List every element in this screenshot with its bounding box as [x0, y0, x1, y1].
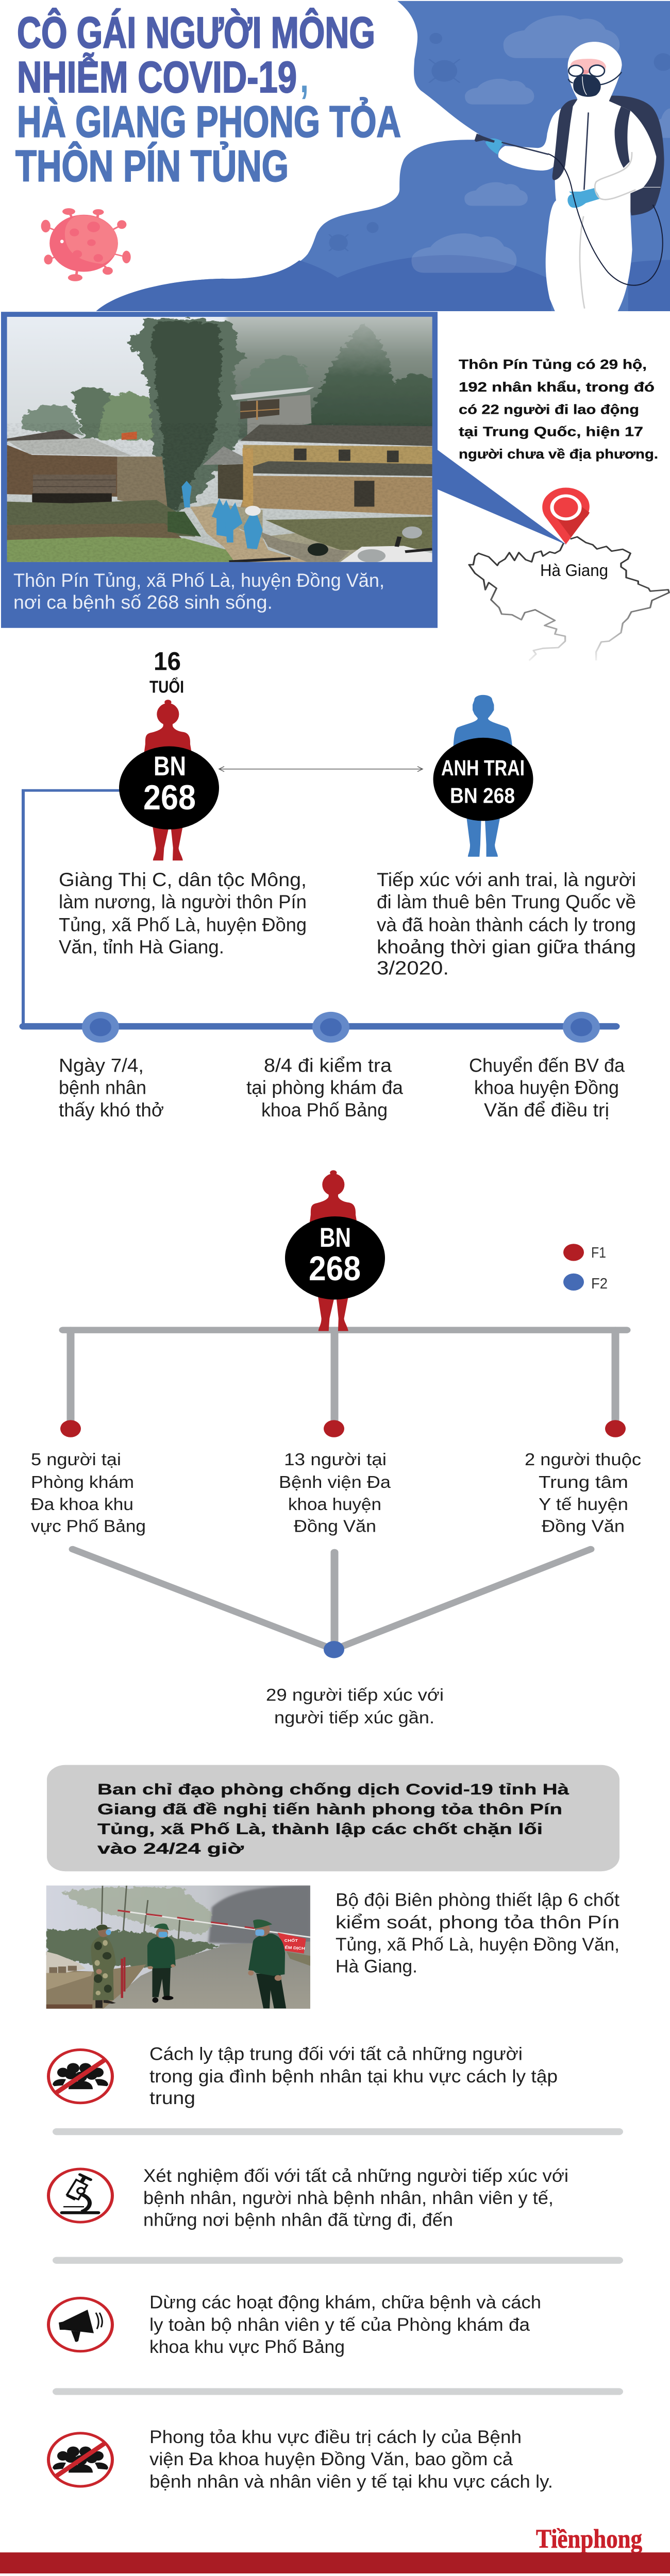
timeline text 2: khoa Phố Bảng — [261, 1099, 388, 1121]
F1 text left: vực Phố Bảng — [31, 1517, 146, 1536]
panel: lockdown proposal: Giang đã đề nghị tiến hành phong tỏa thôn Pín — [97, 1801, 562, 1818]
text: item 2: bệnh nhân, người nhà bệnh nhân, nhân viên y tế, — [143, 2188, 554, 2208]
icon: megaphone — [48, 2298, 112, 2351]
F1 text center — [279, 1450, 391, 1536]
icon: no crowd — [48, 2050, 112, 2103]
panel: lockdown proposal: Tủng, xã Phố Là, thành lập các chốt chặn lối — [97, 1821, 543, 1838]
figure: patient 268: 268 — [143, 778, 196, 817]
timeline text 2 — [246, 1055, 403, 1121]
text: item 4: bệnh nhân và nhân viên y tế tại khu vực cách ly. — [149, 2472, 553, 2492]
F1 text right: Trung tâm — [539, 1472, 628, 1492]
terrain — [118, 456, 167, 510]
village facts text: Thôn Pín Tủng có 29 hộ, — [459, 357, 647, 372]
F2 text — [266, 1685, 444, 1727]
text: brother description: khoảng thời gian giữa tháng — [377, 936, 636, 958]
soldier 1 — [91, 1925, 116, 2008]
clouds — [411, 15, 670, 273]
caption: Thôn Pín Tủng, xã Phố Là, huyện Đồng Văn, — [13, 569, 384, 591]
respirator — [573, 74, 601, 97]
text: item 3 — [149, 2293, 541, 2357]
upper house — [247, 395, 311, 435]
figure: brother: BN 268 — [450, 783, 515, 807]
timeline text 3: Văn để điều trị — [484, 1099, 609, 1121]
soldier 3 — [248, 1920, 286, 2008]
icon: microscope — [48, 2169, 112, 2222]
soldier 2 — [147, 1924, 176, 2003]
timeline — [23, 1012, 616, 1043]
age label: TUỔI — [149, 676, 184, 697]
map label: Hà Giang — [540, 561, 608, 580]
left house — [7, 430, 81, 442]
legend — [563, 1244, 608, 1292]
background conifers — [307, 323, 436, 428]
hillside vegetation — [46, 1929, 219, 1967]
small dark viruses — [329, 33, 670, 251]
panel: village photo — [1, 312, 439, 628]
red posts — [121, 1957, 125, 1998]
icon: no crowd second — [48, 2433, 112, 2486]
timeline text 1: bệnh nhân — [59, 1077, 146, 1098]
figure: patient 268 second: 268 — [309, 1249, 361, 1287]
photo: border guards at checkpoint — [46, 1886, 310, 2009]
F1 text center: khoa huyện — [288, 1495, 381, 1514]
F1 text center: Đồng Văn — [294, 1517, 376, 1536]
timeline text 2: 8/4 đi kiểm tra — [264, 1055, 392, 1076]
figure: patient 268: BN — [154, 751, 186, 782]
text: checkpoints — [336, 1890, 619, 1977]
zip — [584, 112, 589, 190]
icon: map pin — [542, 488, 590, 544]
figure: brother — [433, 695, 533, 857]
village facts text: người chưa về địa phương. — [459, 447, 658, 462]
title: THÔN PÍN TỦNG — [15, 141, 289, 191]
timeline text 3: khoa huyện Đồng — [474, 1077, 619, 1098]
timeline node 3 — [563, 1012, 600, 1043]
motorbike — [340, 546, 432, 562]
title: CÔ GÁI NGƯỜI MÔNG — [17, 8, 375, 57]
footer bar — [0, 2552, 670, 2573]
village facts text: 192 nhân khẩu, trong đó — [459, 380, 655, 395]
text: brother description — [377, 869, 636, 979]
central tree — [128, 318, 245, 512]
title: HÀ GIANG PHONG TỎA — [17, 97, 401, 147]
F1 text right: 2 người thuộc — [525, 1450, 641, 1469]
text: item 1: trong gia đình bệnh nhân tại khu vực cách ly tập — [149, 2066, 558, 2087]
straps — [615, 106, 630, 168]
text: item 3: khoa khu vực Phố Bảng — [149, 2337, 345, 2357]
F1 text left: Phòng khám — [31, 1472, 134, 1492]
text: item 3: Dừng các hoạt động khám, chữa bệnh và cách — [149, 2293, 541, 2313]
timeline text 2: tại phòng khám đa — [246, 1077, 403, 1098]
title: NHIỄM COVID-19 — [17, 53, 297, 102]
panel: lockdown proposal: vào 24/24 giờ — [97, 1840, 244, 1857]
F1 text left: Đa khoa khu — [31, 1495, 133, 1514]
panel: lockdown proposal — [47, 1765, 619, 1871]
text: item 4: Phong tỏa khu vực điều trị cách ly của Bệnh — [149, 2427, 522, 2447]
village facts text — [459, 357, 658, 462]
callout wedge — [438, 450, 566, 545]
text: checkpoints: kiểm soát, phong tỏa thôn Pín — [336, 1912, 619, 1933]
spray lance and hose — [475, 133, 495, 143]
texture on roofs and ground — [7, 423, 432, 563]
figure: patient 268 second: BN — [320, 1223, 351, 1253]
panel: lockdown proposal: Ban chỉ đạo phòng chống dịch Covid-19 tỉnh Hà — [97, 1781, 569, 1798]
suit outlines — [595, 152, 635, 199]
F2 dot — [324, 1641, 344, 1658]
text: item 4: viện Đa khoa huyện Đồng Văn, bao gồm cả — [149, 2449, 513, 2469]
text: checkpoints: Hà Giang. — [336, 1957, 417, 1977]
caption: nơi ca bệnh số 268 sinh sống. — [13, 591, 273, 613]
F1 text right: Đồng Văn — [542, 1517, 625, 1536]
figure: patient 268 — [119, 700, 219, 860]
timeline text 3: Chuyển đến BV đa — [469, 1055, 625, 1076]
text: item 2: những nơi bệnh nhân đã từng đi, đến — [143, 2210, 453, 2230]
icon: coronavirus — [41, 208, 131, 281]
text: patient description: Văn, tỉnh Hà Giang. — [59, 936, 224, 958]
gloves — [485, 139, 504, 155]
F2 text: 29 người tiếp xúc với — [266, 1685, 444, 1704]
map: Hà Giang — [469, 537, 669, 660]
text: item 1 — [149, 2044, 558, 2108]
text: checkpoints: Bộ đội Biên phòng thiết lập 6 chốt — [336, 1890, 619, 1910]
age label — [149, 647, 184, 697]
F1 text left — [31, 1450, 146, 1536]
village facts text: tại Trung Quốc, hiện 17 — [459, 425, 643, 439]
F1 text center: 13 người tại — [284, 1450, 387, 1469]
arrow: contact between patient and brother — [219, 767, 423, 772]
illustration: person in protective suit spraying disinfectant — [475, 42, 664, 313]
text: patient description: Tủng, xã Phố Là, huyện Đồng — [59, 914, 307, 936]
barrier pole — [118, 1910, 310, 1937]
timeline text 1 — [59, 1055, 164, 1121]
banner: ỂM DỊCH — [284, 1944, 305, 1951]
darker hills — [96, 255, 670, 311]
medical team — [181, 481, 263, 549]
figure: patient 268 second — [285, 1170, 385, 1331]
main house — [243, 445, 432, 467]
text: checkpoints: Tủng, xã Phố Là, huyện Đồng Văn, — [336, 1935, 619, 1955]
text: patient description: Giàng Thị C, dân tộc Mông, — [59, 869, 307, 890]
timeline node 1 — [82, 1012, 119, 1043]
header illustration — [41, 1, 670, 311]
timeline text 3 — [469, 1055, 625, 1121]
title — [15, 8, 401, 191]
F1 text center: Bệnh viện Đa — [279, 1472, 391, 1492]
age label: 16 — [154, 647, 181, 675]
timeline text 1: Ngày 7/4, — [59, 1055, 144, 1076]
title: , — [300, 53, 309, 102]
white suit — [498, 42, 656, 313]
F1 dots — [60, 1420, 626, 1437]
banner — [278, 1933, 306, 1954]
text: item 2 — [143, 2166, 568, 2230]
text: item 1: Cách ly tập trung đối với tất cả những người — [149, 2044, 523, 2064]
photo: foggy village with medical team — [7, 313, 439, 563]
F1 text right — [525, 1450, 641, 1536]
figure: brother: ANH TRAI — [441, 756, 525, 780]
text: item 1: trung — [149, 2088, 195, 2108]
text: patient description: làm nương, là người thôn Pín — [59, 891, 307, 912]
contact tree connectors — [63, 1330, 627, 1650]
text: brother description: 3/2020. — [377, 957, 449, 979]
text: item 4 — [149, 2427, 553, 2492]
F1 text left: 5 người tại — [31, 1450, 121, 1469]
road — [102, 1941, 310, 2009]
bare trees — [61, 1886, 212, 1939]
banner: CHỐT — [284, 1938, 298, 1943]
connector to timeline — [23, 790, 120, 1026]
timeline text 1: thấy khó thở — [59, 1099, 164, 1121]
timeline node 2 — [312, 1012, 349, 1043]
text: item 3: ly toàn bộ nhân viên y tế của Phòng khám đa — [149, 2315, 530, 2335]
caption — [13, 569, 384, 613]
backpack tank — [608, 96, 664, 215]
face — [571, 59, 606, 72]
legend: F2 — [591, 1275, 608, 1292]
text: patient description — [59, 869, 307, 958]
legend: F1 — [591, 1245, 606, 1261]
text: brother description: Tiếp xúc với anh trai, là người — [377, 869, 636, 890]
text: item 2: Xét nghiệm đối với tất cả những người tiếp xúc với — [143, 2166, 568, 2186]
ditch and mound — [46, 1964, 146, 2009]
background blue wave — [96, 1, 670, 311]
F2 text: người tiếp xúc gần. — [274, 1708, 434, 1727]
village facts text: có 22 người đi lao động — [459, 402, 639, 417]
F1 text right: Y tế huyện — [539, 1495, 628, 1514]
